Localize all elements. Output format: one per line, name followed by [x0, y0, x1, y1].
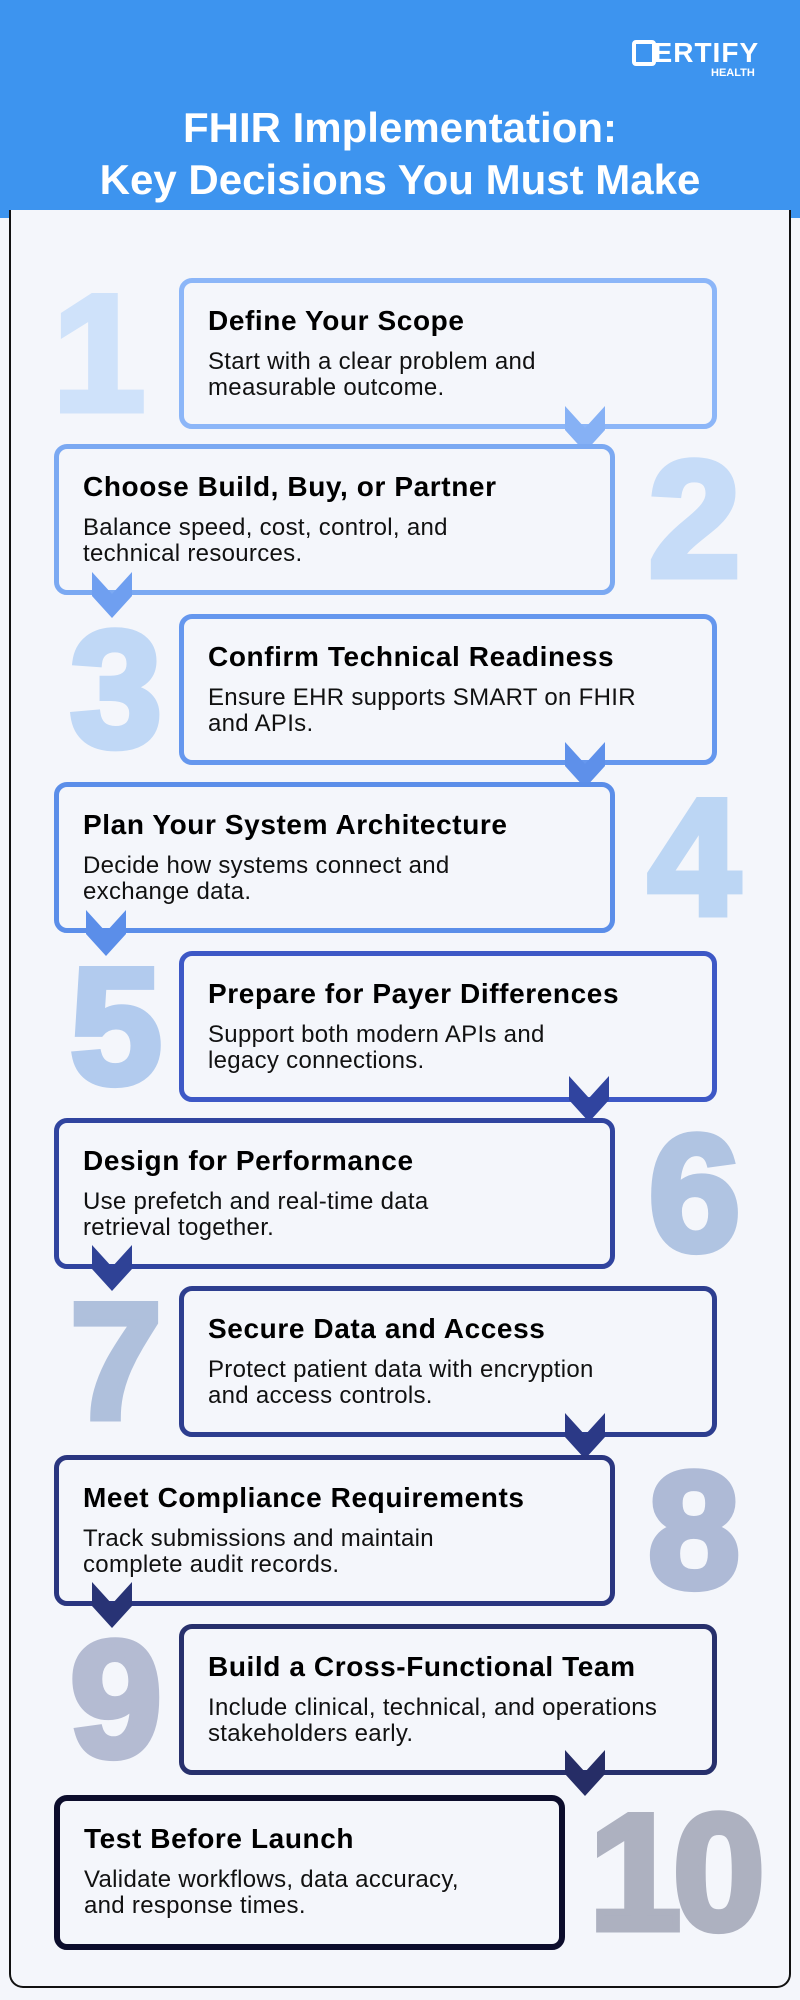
logo — [632, 37, 759, 79]
box 8: Track submissions and maintain — [83, 1525, 434, 1552]
arrow 9 — [565, 1750, 605, 1796]
number 8: 8 — [648, 1438, 732, 1622]
logo: ERTIFY — [654, 37, 759, 68]
number 10: 10 — [589, 1780, 757, 1964]
box 10: Test Before Launch — [84, 1823, 354, 1854]
step 5 — [70, 934, 717, 1118]
box 6 — [54, 1118, 615, 1269]
step 2 — [54, 427, 738, 611]
step 6 — [54, 1101, 738, 1285]
arrow 4 — [86, 910, 126, 956]
box 2: technical resources. — [83, 540, 302, 567]
box 6: retrieval together. — [83, 1214, 274, 1241]
box 10: and response times. — [84, 1892, 306, 1919]
box 6: Design for Performance — [83, 1145, 414, 1176]
box 9: stakeholders early. — [208, 1720, 413, 1747]
box 4: exchange data. — [83, 878, 251, 905]
logo: HEALTH — [711, 67, 755, 79]
arrow 1 — [565, 406, 605, 444]
number 2: 2 — [649, 427, 732, 611]
box 7 — [179, 1286, 717, 1437]
box 5: Support both modern APIs and — [208, 1021, 545, 1048]
box 5: Prepare for Payer Differences — [208, 978, 619, 1009]
box 10 — [54, 1795, 565, 1950]
arrow 8 — [92, 1582, 132, 1628]
arrow 2 — [92, 572, 132, 618]
box 6: Use prefetch and real-time data — [83, 1188, 428, 1215]
header — [0, 0, 800, 218]
box 10: Validate workflows, data accuracy, — [84, 1866, 459, 1893]
box 3: Confirm Technical Readiness — [208, 641, 614, 672]
number 6: 6 — [649, 1101, 732, 1285]
box 8 — [54, 1455, 615, 1606]
number 1: 1 — [53, 261, 137, 445]
step 8 — [54, 1438, 738, 1622]
number 5: 5 — [70, 934, 154, 1118]
step 3 — [70, 597, 717, 781]
box 4: Plan Your System Architecture — [83, 809, 508, 840]
box 3: Ensure EHR supports SMART on FHIR — [208, 684, 636, 711]
box 2: Choose Build, Buy, or Partner — [83, 471, 497, 502]
number 7: 7 — [70, 1269, 154, 1453]
box 8: Meet Compliance Requirements — [83, 1482, 525, 1513]
title: FHIR Implementation: — [183, 104, 617, 151]
box 3: and APIs. — [208, 710, 313, 737]
box 4: Decide how systems connect and — [83, 852, 450, 879]
arrow 6 — [92, 1245, 132, 1291]
step 10 — [54, 1780, 762, 1964]
box 1 — [179, 278, 717, 429]
arrow 3 — [565, 742, 605, 782]
arrow 7 — [565, 1413, 605, 1455]
box 4 — [54, 782, 615, 933]
number 3: 3 — [70, 597, 154, 781]
box 9: Build a Cross-Functional Team — [208, 1651, 636, 1682]
step 7 — [70, 1269, 717, 1453]
box 2 — [54, 444, 615, 595]
step 1 — [53, 261, 717, 445]
arrow 5 — [569, 1076, 609, 1118]
box 9: Include clinical, technical, and operations — [208, 1694, 657, 1721]
title: Key Decisions You Must Make — [100, 156, 700, 203]
box 8: complete audit records. — [83, 1551, 339, 1578]
box 9 — [179, 1624, 717, 1775]
box 7: Secure Data and Access — [208, 1313, 545, 1344]
step 4 — [54, 765, 742, 949]
box 5: legacy connections. — [208, 1047, 424, 1074]
box 2: Balance speed, cost, control, and — [83, 514, 448, 541]
box 5 — [179, 951, 717, 1102]
box 1: Define Your Scope — [208, 305, 465, 336]
box 3 — [179, 614, 717, 765]
box 1: Start with a clear problem and — [208, 348, 536, 375]
step 9 — [70, 1607, 717, 1791]
title — [100, 104, 700, 203]
box 7: Protect patient data with encryption — [208, 1356, 594, 1383]
number 9: 9 — [70, 1607, 154, 1791]
number 4: 4 — [648, 765, 732, 949]
box 1: measurable outcome. — [208, 374, 444, 401]
box 7: and access controls. — [208, 1382, 433, 1409]
